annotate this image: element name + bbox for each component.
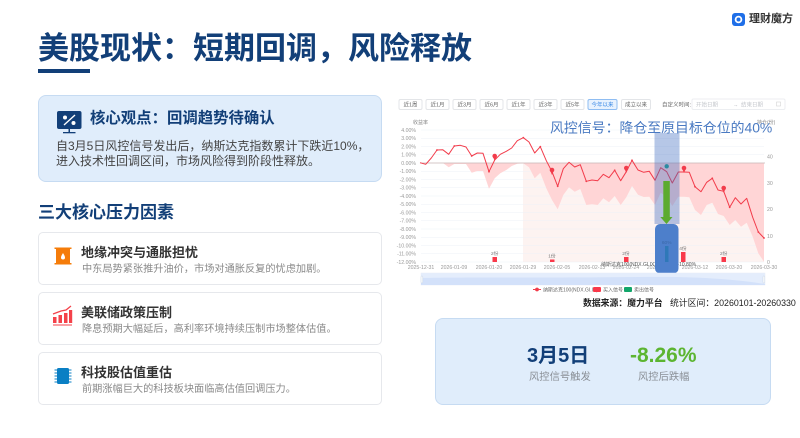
y axis left: 3.00% (401, 136, 416, 142)
icon: chip (54, 368, 72, 384)
holding bar labels: 1份 (548, 252, 556, 260)
panel: Fed factor (38, 292, 382, 345)
stat: drawdown (630, 344, 697, 383)
legend: 纳斯达克100(NDX.GI.IX) (543, 286, 598, 294)
title: 美股现状：短期回调，风险释放 (38, 31, 472, 66)
custom date range: 结束日期 (741, 100, 764, 108)
range slider (421, 273, 765, 285)
y axis left: -10.00% (397, 244, 416, 250)
custom date range: 开始日期 (696, 100, 719, 108)
holding bar labels: 2份 (622, 250, 630, 257)
stat value: -8.26% (630, 344, 697, 367)
custom date range: 自定义时间: (662, 100, 692, 108)
sell signal pin (664, 164, 669, 168)
drawdown area (420, 163, 764, 262)
period tabs: 近3年 (538, 100, 553, 108)
core view heading: 核心观点：回调趋势待确认 (90, 110, 275, 127)
factor title: 科技股估值重估 (81, 365, 172, 380)
y axis left: 2.00% (401, 144, 416, 150)
stat value: 3月5日 (527, 345, 589, 367)
legend (533, 286, 654, 294)
logo text: 理财魔方 (749, 13, 793, 25)
down arrow (660, 181, 672, 224)
y axis left: -2.00% (400, 178, 416, 184)
title underline (38, 69, 90, 73)
section heading: 三大核心压力因素 (38, 203, 174, 222)
stat label: 风控信号触发 (529, 372, 591, 383)
date axis: 2025-12-31 (408, 265, 434, 271)
return line points (436, 137, 765, 239)
y axis right: 0 (767, 260, 770, 266)
axis titles (413, 119, 776, 126)
factor text: 降息预期大幅延后，高利率环境持续压制市场整体估值。 (82, 324, 337, 335)
panel: core view (38, 95, 382, 182)
y axis left: -5.00% (400, 202, 416, 208)
period tabs: 近5年 (565, 100, 580, 108)
factor title: 地缘冲突与通胀担忧 (81, 245, 198, 260)
custom date range: → (733, 102, 738, 108)
panel: key stats (435, 318, 771, 405)
y axis right: 20 (767, 207, 773, 213)
core view text (56, 139, 369, 168)
zero line (420, 162, 765, 164)
overlapping tooltip text: 纳斯达克100(NDX.GI.IX)最大回撤:-10.80% (601, 261, 697, 268)
period tabs: 近6月 (484, 100, 499, 108)
period tabs: 成立以来 (625, 100, 647, 108)
factor text: 前期涨幅巨大的科技板块面临高估值回调压力。 (82, 384, 296, 395)
icon: rising bars (52, 306, 72, 326)
highlight box (655, 224, 678, 274)
highlight box label: 60% (662, 240, 672, 246)
factor text: 中东局势紧张推升油价，市场对通胀反复的忧虑加剧。 (82, 264, 326, 275)
y axis left: -11.00% (397, 252, 416, 258)
buy signal pins (492, 154, 726, 193)
holding bar labels: 4份 (679, 245, 687, 252)
period tabs: 近1月 (430, 100, 445, 108)
period tabs (399, 100, 650, 110)
highlight band (654, 133, 680, 224)
holding bars (492, 252, 726, 262)
y axis right (767, 154, 773, 266)
legend: 卖出信号 (634, 286, 654, 294)
y axis left: -1.00% (400, 169, 416, 175)
y axis left: -3.00% (400, 186, 416, 192)
date axis: 2026-01-29 (510, 265, 536, 271)
icon: monitor percent (57, 111, 82, 134)
panel: geopolitics factor (38, 232, 382, 285)
date axis: 2026-02-13 (579, 265, 605, 271)
return line (420, 138, 764, 238)
date axis: 2026-03-30 (751, 265, 777, 271)
period tabs: 近1年 (511, 100, 526, 108)
period tabs: 今年以来 (591, 100, 614, 108)
y axis left (397, 128, 416, 266)
callout: 风控信号：降仓至原目标仓位的40% (550, 120, 772, 136)
custom date range (662, 99, 785, 110)
y axis left: -9.00% (400, 235, 416, 241)
holding bar labels (491, 245, 728, 260)
y axis left: 0.00% (401, 161, 416, 167)
y axis left: -6.00% (400, 210, 416, 216)
date axis: 2026-01-09 (441, 265, 467, 271)
period tabs: 近3月 (457, 100, 472, 108)
holding bar labels: 2份 (491, 250, 499, 257)
date axis (408, 265, 777, 271)
y axis right: 10 (767, 234, 773, 240)
risk zone background (523, 163, 764, 262)
y axis left: 1.00% (401, 152, 416, 158)
date axis: 2026-02-24 (613, 265, 639, 271)
factor title: 美联储政策压制 (81, 305, 172, 320)
stat: signal date (527, 345, 591, 383)
y axis left: -4.00% (400, 194, 416, 200)
stat label: 风控后跌幅 (638, 372, 689, 383)
y axis left: -12.00% (397, 260, 416, 266)
y axis left: -8.00% (400, 227, 416, 233)
legend: 买入信号 (603, 286, 623, 294)
icon: oil barrel (54, 248, 72, 264)
highlight box bar (665, 246, 668, 262)
y axis right: 30 (767, 181, 773, 187)
period tabs: 近1周 (403, 100, 418, 108)
chart panel (396, 98, 786, 294)
axis titles: 持仓(份) (757, 119, 776, 126)
panel: tech factor (38, 352, 382, 405)
holding bar labels: 2份 (720, 250, 728, 257)
y axis left: -7.00% (400, 218, 416, 224)
y axis left: 4.00% (401, 128, 416, 134)
icon: logo mark (732, 13, 745, 26)
date axis: 2026-01-20 (476, 265, 502, 271)
core view text: 自3月5日风控信号发出后，纳斯达克指数累计下跌近10%， (56, 139, 369, 153)
core view text: 进入技术性回调区间，市场风险得到阶段性释放。 (56, 154, 320, 168)
date axis: 2026-03-20 (716, 265, 742, 271)
date axis: 2026-02-05 (544, 265, 570, 271)
axis titles: 收益率 (413, 119, 428, 126)
data source: 数据来源：魔力平台 统计区间：20260101-20260330 (583, 298, 796, 308)
date axis: 2026-03-04 (647, 265, 673, 271)
logo (732, 12, 793, 26)
y axis right: 40 (767, 154, 773, 160)
date axis: 2026-03-12 (682, 265, 708, 271)
